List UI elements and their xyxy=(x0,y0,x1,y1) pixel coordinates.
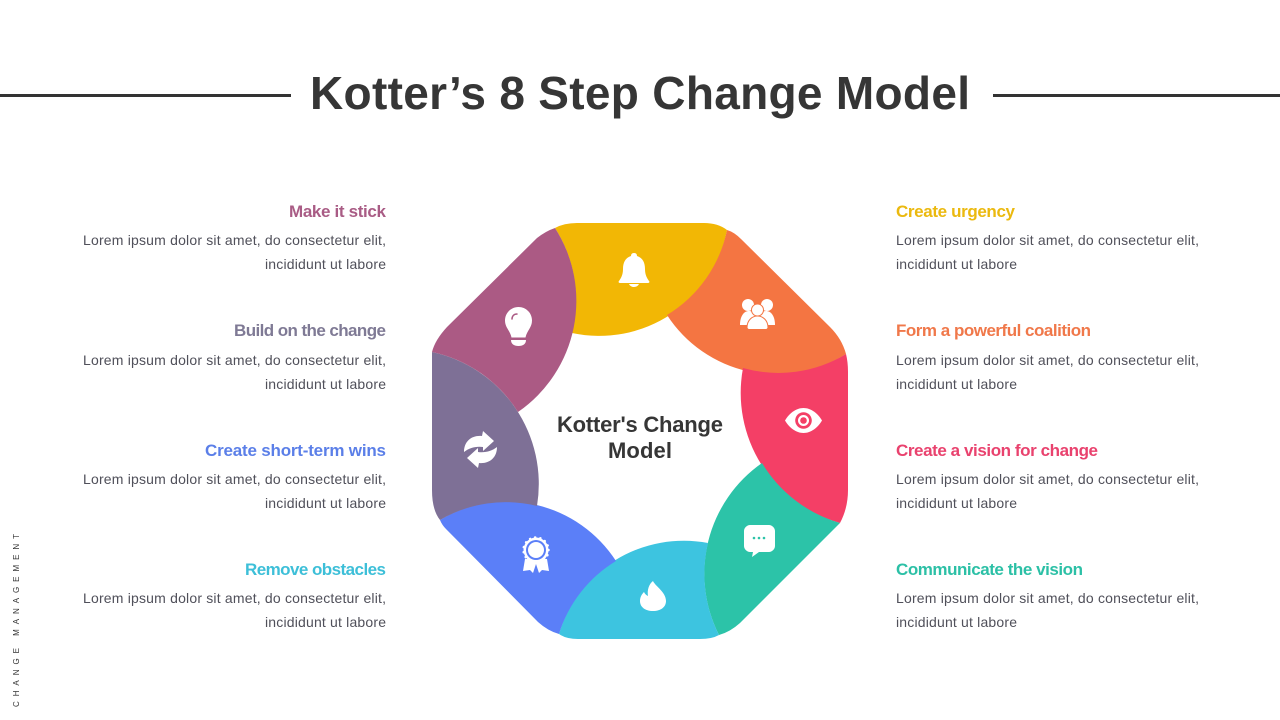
step 3 text: create a vision for change: Lorem ipsum dolor sit amet, do consectetur elit, xyxy=(896,471,1199,487)
step 3 text: create a vision for change: incididunt ut labore xyxy=(896,495,1017,511)
segment: yellow xyxy=(555,223,727,336)
step 4 text: communicate the vision: Communicate the vision xyxy=(896,560,1083,579)
step 5 text: remove obstacles: Lorem ipsum dolor sit amet, do consectetur elit, xyxy=(83,590,386,606)
step 4 text: communicate the vision: incididunt ut labore xyxy=(896,614,1017,630)
title: Kotter’s 8 Step Change Model xyxy=(310,67,970,119)
step 4 text: communicate the vision: Lorem ipsum dolor sit amet, do consectetur elit, xyxy=(896,590,1199,606)
step 7 text: build on the change xyxy=(83,321,386,392)
step 5 text: remove obstacles: incididunt ut labore xyxy=(265,614,386,630)
center label: Model xyxy=(608,438,672,463)
center label: Kotter's Change xyxy=(557,412,723,437)
segment: blue xyxy=(440,502,616,634)
icon: bell xyxy=(619,253,649,287)
step 5 text: remove obstacles xyxy=(83,560,386,630)
step 1 text: create urgency: incididunt ut labore xyxy=(896,256,1017,272)
step 2 text: form a powerful coalition: Lorem ipsum dolor sit amet, do consectetur elit, xyxy=(896,352,1199,368)
icon: light bulb xyxy=(505,307,532,346)
icon: speech bubble xyxy=(744,525,775,557)
segment: slate xyxy=(432,352,539,520)
segment: orange xyxy=(667,230,846,374)
right text panel xyxy=(896,202,1199,630)
step 3 text: create a vision for change: Create a vision for change xyxy=(896,441,1098,460)
center label xyxy=(557,412,723,463)
icon: flame xyxy=(640,581,666,611)
step 1 text: create urgency: Lorem ipsum dolor sit amet, do consectetur elit, xyxy=(896,232,1199,248)
step 5 text: remove obstacles: Remove obstacles xyxy=(245,560,386,579)
step 7 text: build on the change: Build on the change xyxy=(234,321,386,340)
step 1 text: create urgency: Create urgency xyxy=(896,202,1016,221)
step 1 text: create urgency xyxy=(896,202,1199,272)
step 8 text: make it stick xyxy=(83,202,387,272)
step 6 text: create short-term wins: incididunt ut labore xyxy=(265,495,386,511)
icon: eye xyxy=(785,408,822,433)
octagon cycle diagram xyxy=(432,223,848,639)
step 7 text: build on the change: Lorem ipsum dolor sit amet, do consectetur elit, xyxy=(83,352,386,368)
segment: pink xyxy=(741,354,848,523)
segment: green xyxy=(704,463,840,635)
step 7 text: build on the change: incididunt ut labore xyxy=(265,376,386,392)
step 6 text: create short-term wins: Create short-term wins xyxy=(205,441,386,460)
step 3 text: create a vision for change xyxy=(896,441,1199,511)
step 2 text: form a powerful coalition: incididunt ut labore xyxy=(896,376,1017,392)
icon: people xyxy=(740,299,775,330)
segment: purple xyxy=(432,228,576,412)
step 6 text: create short-term wins: Lorem ipsum dolor sit amet, do consectetur elit, xyxy=(83,471,386,487)
title xyxy=(0,67,1280,119)
step 8 text: make it stick: incididunt ut labore xyxy=(265,256,386,272)
step 2 text: form a powerful coalition xyxy=(896,321,1199,392)
icon: refresh arrows xyxy=(464,431,497,468)
step 6 text: create short-term wins xyxy=(83,441,386,511)
step 8 text: make it stick: Make it stick xyxy=(289,202,387,221)
icon: award ribbon xyxy=(523,538,549,573)
step 8 text: make it stick: Lorem ipsum dolor sit amet, do consectetur elit, xyxy=(83,232,386,248)
step 4 text: communicate the vision xyxy=(896,560,1199,630)
left text panel xyxy=(83,202,387,630)
step 2 text: form a powerful coalition: Form a powerful coalition xyxy=(896,321,1091,340)
vertical label: change management: CHANGE MANAGEMENT xyxy=(12,534,21,707)
segment: light blue xyxy=(559,541,719,639)
